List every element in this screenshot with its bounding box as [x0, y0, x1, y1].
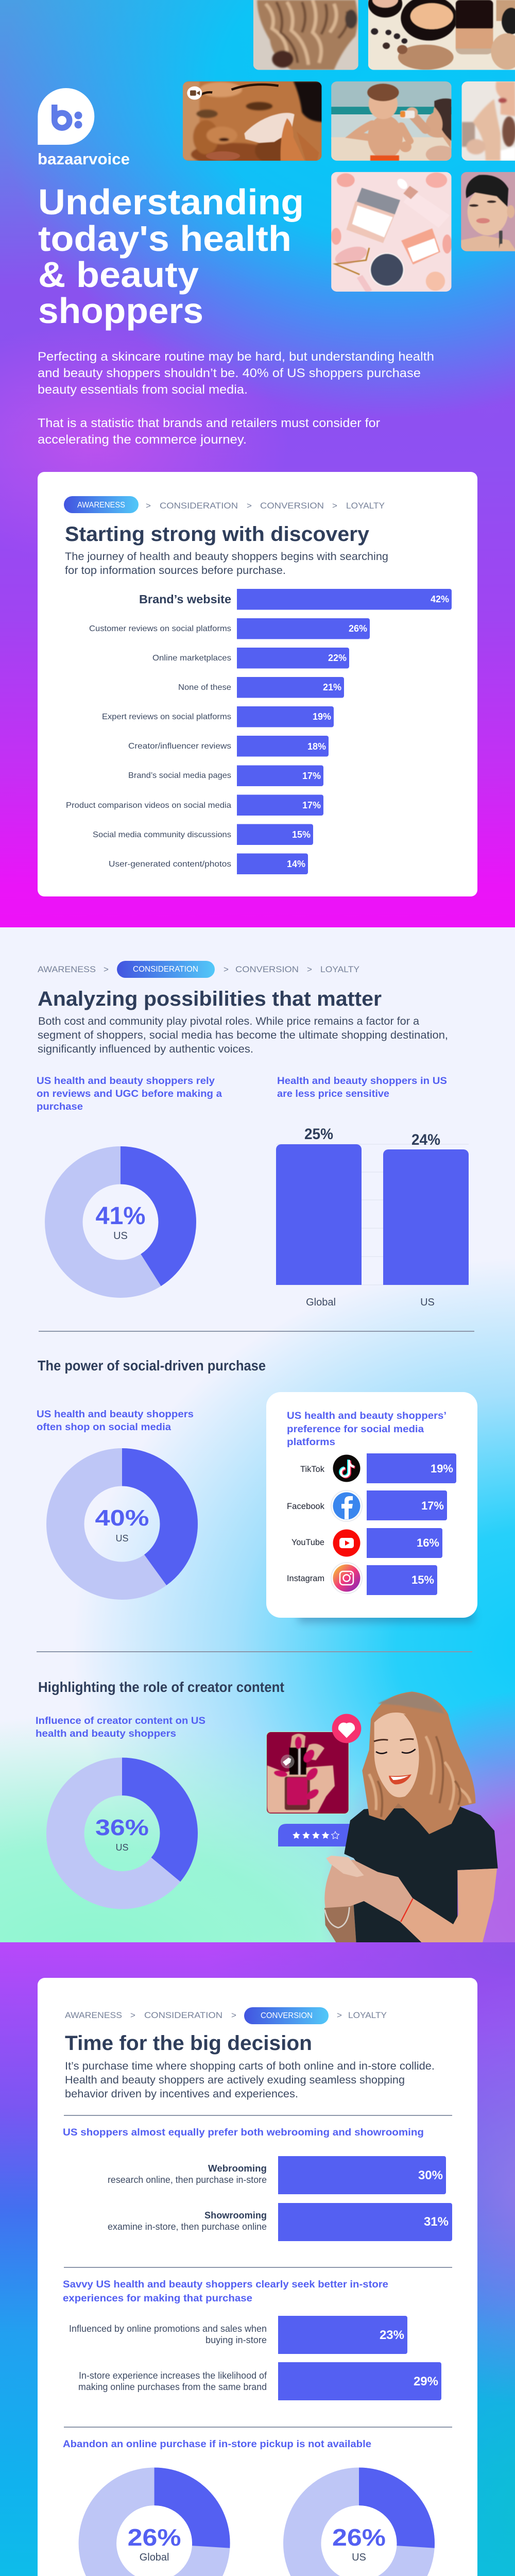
journey stepper: awareness: CONSIDERATION	[160, 501, 238, 511]
title: Understanding	[38, 182, 304, 222]
subheading: shop on social	[37, 1409, 194, 1433]
photo: skincare flat lay	[331, 172, 452, 292]
description: for top information sources before purchase.	[65, 565, 286, 577]
bar chart: information sources: Creator/influencer reviews	[128, 742, 231, 751]
bar chart: information sources: Expert reviews on social platforms	[102, 713, 231, 721]
description: The journey of health and beauty shoppers begins with searching	[65, 551, 388, 563]
heading: big decision: Time for the big decision	[65, 2032, 312, 2055]
journey stepper: conversion	[65, 2007, 387, 2024]
heading: role of creator content: Highlighting the role of creator content	[38, 1679, 284, 1695]
bar chart: information sources: Brand’s website	[139, 592, 231, 606]
title	[38, 182, 304, 331]
subheading: creator influence: Influence of creator content on US	[36, 1716, 205, 1726]
heading: starting strong: Starting strong with discovery	[65, 523, 370, 546]
bar chart: information sources: Online marketplaces	[152, 654, 231, 663]
bar chart: information sources: Customer reviews on social platforms	[89, 624, 231, 633]
platform labels: YouTube	[291, 1537, 324, 1547]
bar chart: information sources: None of these	[178, 683, 231, 692]
description: Both cost and community play pivotal roles. While price remains a factor for a	[38, 1015, 419, 1027]
journey stepper: awareness: >	[247, 501, 252, 511]
logo: bazaarvoice	[38, 88, 130, 168]
bar chart: in-store influence: Influenced by online promotions and sales when	[69, 2324, 267, 2334]
journey stepper: consideration	[38, 961, 359, 978]
journey stepper: conversion: >	[337, 2010, 342, 2020]
donut chart: 36%	[65, 1776, 179, 1890]
description: significantly influenced by authentic voices.	[38, 1043, 253, 1055]
section: conversion	[0, 1942, 515, 2576]
donut chart: 26% global: Global	[140, 2552, 169, 2563]
subheading: reviews and UGC: purchase	[37, 1101, 83, 1112]
subheading: shop on social: often shop on social media	[37, 1422, 171, 1433]
section: hero and awareness	[0, 0, 515, 927]
journey stepper: consideration: LOYALTY	[320, 964, 359, 974]
platform labels: Instagram	[287, 1573, 324, 1583]
journey stepper: awareness	[64, 496, 385, 513]
bar chart: information sources: 14%	[287, 859, 305, 869]
journey stepper: consideration: >	[307, 964, 312, 974]
subheading: reviews and UGC: US health and beauty shoppers rely	[37, 1076, 215, 1087]
bar chart: webrooming vs showrooming: 31%	[424, 2215, 449, 2229]
bar chart: in-store influence: In-store experience increases the likelihood of	[79, 2370, 267, 2381]
intro text: and beauty shoppers shouldn’t be. 40% of US shoppers purchase	[38, 366, 421, 380]
donut chart: 36%: US	[115, 1842, 129, 1853]
icon: Instagram	[331, 1563, 362, 1594]
subheading: in-store experiences: experiences for making that purchase	[63, 2293, 252, 2304]
journey stepper: consideration: CONVERSION	[235, 964, 299, 974]
subheading: platforms: US health and beauty shoppers’	[287, 1411, 447, 1421]
subheading: price sensitive	[277, 1076, 447, 1099]
subheading: reviews and UGC	[37, 1076, 222, 1112]
bar chart: in-store influence: 23%	[380, 2328, 404, 2342]
bar chart: information sources: 17%	[302, 771, 321, 781]
bar chart: information sources: User-generated content/photos	[109, 860, 231, 869]
photo: woman with supplement	[461, 81, 515, 161]
journey stepper: conversion: AWARENESS	[65, 2010, 122, 2020]
platform labels	[287, 1464, 324, 1583]
journey stepper: awareness: >	[332, 501, 337, 511]
platform values: 17%	[421, 1499, 444, 1512]
bar chart: webrooming vs showrooming: examine in-store, then purchase online	[108, 2222, 267, 2232]
description	[65, 2060, 435, 2100]
subheading: price sensitive: Health and beauty shoppers in US	[277, 1076, 447, 1087]
bar chart: information sources: 17%	[302, 800, 321, 810]
icon: heart badge	[332, 1714, 361, 1743]
subheading: price sensitive: are less price sensitive	[277, 1089, 389, 1099]
donut chart: 40%: 40%	[95, 1505, 149, 1531]
bar chart: information sources: 42%	[431, 594, 449, 604]
heading: analyzing possibilities: Analyzing possibilities that matter	[38, 988, 382, 1010]
subheading: in-store experiences: Savvy US health and beauty shoppers clearly seek better in-store	[63, 2279, 388, 2290]
bar chart: information sources: Social media community discussions	[93, 831, 231, 839]
bar chart: price sensitivity: 25%	[304, 1126, 333, 1143]
journey stepper: consideration: >	[104, 964, 109, 974]
photo: face cream	[180, 81, 323, 166]
journey stepper: conversion: >	[231, 2010, 236, 2020]
description: segment of shoppers, social media has become the ultimate shopping destination,	[38, 1029, 448, 1041]
donut chart: 40%: US	[115, 1533, 129, 1544]
photo collage	[180, 0, 515, 292]
icon: Facebook	[331, 1490, 362, 1521]
donut chart: 41%	[64, 1165, 177, 1279]
logo: bazaarvoice: bazaarvoice	[38, 150, 130, 168]
woman with phone	[324, 1691, 498, 1943]
subheading: creator influence: health and beauty shoppers	[36, 1728, 176, 1739]
journey stepper: conversion: >	[130, 2010, 135, 2020]
panel: awareness card	[38, 472, 477, 896]
bar chart: in-store influence: 29%	[414, 2375, 438, 2388]
journey stepper: awareness: AWARENESS	[77, 501, 125, 510]
intro text: That is a statistic that brands and retailers must consider for	[38, 416, 380, 430]
title: today's health	[38, 218, 291, 259]
platform values: 16%	[417, 1536, 439, 1549]
product photo: nail polish	[266, 1732, 349, 1814]
bar chart: webrooming vs showrooming: Showrooming	[204, 2210, 267, 2221]
bar chart: price sensitivity: US	[420, 1297, 435, 1308]
bar chart: information sources: Product comparison videos on social media	[66, 801, 231, 810]
donut chart: 26% global	[97, 2486, 211, 2576]
subheading: in-store experiences	[63, 2279, 388, 2304]
title: & beauty	[38, 255, 199, 295]
bar chart: information sources: 15%	[292, 829, 311, 840]
journey stepper: awareness: CONVERSION	[260, 501, 324, 511]
donut chart: 26% global: 26%	[128, 2524, 181, 2551]
platform values: 15%	[411, 1573, 434, 1586]
photo: child and sunscreen	[331, 81, 456, 163]
subheading: reviews and UGC: on reviews and UGC before making a	[37, 1089, 222, 1099]
journey stepper: consideration: >	[224, 964, 229, 974]
panel: platform preference card	[266, 1392, 477, 1622]
bar chart: in-store influence: buying in-store	[205, 2335, 267, 2345]
photo: makeup products	[368, 0, 515, 70]
heading: social-driven purchase: The power of social-driven purchase	[38, 1358, 266, 1374]
section: consideration	[0, 927, 515, 1942]
bar chart: webrooming vs showrooming: 30%	[418, 2168, 443, 2182]
journey stepper: conversion: LOYALTY	[348, 2010, 387, 2020]
donut chart: 41%: 41%	[96, 1202, 145, 1230]
subheading: abandon online purchase: Abandon an online purchase if in-store pickup is not available	[63, 2439, 371, 2450]
bar chart: price sensitivity	[276, 1126, 469, 1308]
bar chart: webrooming vs showrooming: Webrooming	[208, 2163, 267, 2174]
bar chart: webrooming vs showrooming: research online, then purchase in-store	[108, 2175, 267, 2185]
bar chart: information sources	[66, 589, 452, 874]
donut chart: 36%: 36%	[95, 1815, 149, 1840]
intro text: beauty essentials from social media.	[38, 383, 248, 397]
intro text: accelerating the commerce journey.	[38, 433, 247, 447]
bar chart: information sources: 26%	[349, 623, 367, 634]
bar chart: webrooming vs showrooming	[108, 2156, 452, 2241]
icon: video camera	[187, 87, 202, 100]
bar chart: information sources: 19%	[313, 711, 331, 722]
donut chart: 26% US: US	[352, 2552, 366, 2563]
subheading: platforms: preference for social media	[287, 1424, 424, 1435]
subheading: platforms	[287, 1411, 447, 1448]
photo: man shaving	[461, 172, 515, 251]
photo: wavy hair	[253, 0, 358, 70]
rating pill with stars	[278, 1824, 350, 1846]
bars: platform shares	[367, 1453, 456, 1595]
subheading: shop on social: US health and beauty shoppers	[37, 1409, 194, 1420]
journey stepper: consideration: AWARENESS	[38, 964, 96, 974]
journey stepper: awareness: >	[146, 501, 151, 511]
title: shoppers	[38, 291, 203, 331]
journey stepper: conversion: CONSIDERATION	[144, 2010, 222, 2020]
description: Health and beauty shoppers are actively exuding seamless shopping	[65, 2074, 405, 2086]
donut chart: 26% US	[302, 2486, 416, 2576]
description: It’s purchase time where shopping carts of both online and in-store collide.	[65, 2060, 435, 2072]
description: behavior driven by incentives and experiences.	[65, 2088, 298, 2100]
subheading: creator influence	[36, 1716, 205, 1739]
donut chart: 41%: US	[113, 1230, 128, 1242]
icon: YouTube	[333, 1529, 360, 1557]
journey stepper: consideration: CONSIDERATION	[133, 965, 198, 974]
icon: TikTok	[333, 1455, 360, 1482]
description	[38, 1015, 448, 1055]
bar chart: price sensitivity: 24%	[411, 1131, 440, 1148]
description	[65, 551, 388, 577]
intro text	[38, 350, 434, 447]
donut chart: 26% US: 26%	[332, 2524, 386, 2551]
bar chart: price sensitivity: Global	[306, 1297, 336, 1308]
panel: conversion card	[38, 1978, 477, 2576]
intro text: Perfecting a skincare routine may be hard, but understanding health	[38, 350, 434, 364]
donut chart: 40%	[65, 1467, 179, 1581]
subheading: platforms: platforms	[287, 1437, 335, 1448]
platform labels: TikTok	[300, 1464, 324, 1474]
platform values	[411, 1462, 453, 1586]
bar chart: information sources: 18%	[307, 741, 326, 752]
platform labels: Facebook	[287, 1501, 324, 1511]
subheading: webrooming and showrooming: US shoppers almost equally prefer both webrooming and showrooming	[63, 2127, 424, 2138]
journey stepper: conversion: CONVERSION	[261, 2011, 313, 2020]
bar chart: information sources: 22%	[328, 653, 347, 663]
bar chart: in-store influence	[69, 2316, 441, 2400]
platform values: 19%	[431, 1462, 453, 1475]
journey stepper: awareness: LOYALTY	[346, 501, 385, 511]
bar chart: information sources: Brand’s social media pages	[128, 771, 231, 780]
bar chart: in-store influence: making online purchases from the same brand	[78, 2382, 267, 2392]
bar chart: information sources: 21%	[323, 682, 341, 692]
illustration: creator with phone and product card	[266, 1691, 498, 1943]
